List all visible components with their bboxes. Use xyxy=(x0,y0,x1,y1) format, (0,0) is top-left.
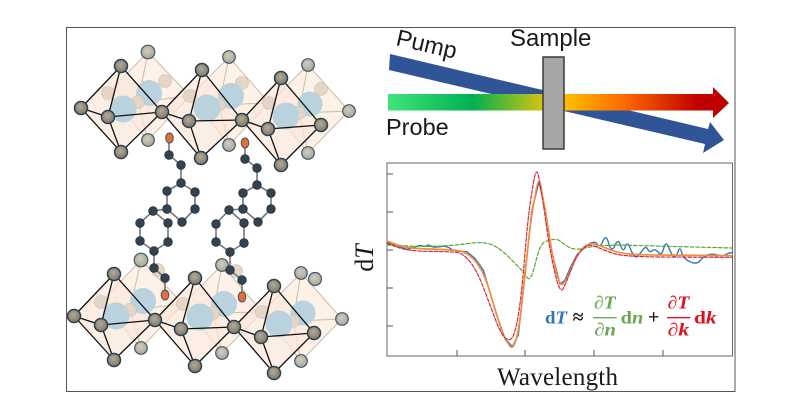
x axis label: Wavelength xyxy=(497,364,618,391)
formula: dT/dk term: ∂k xyxy=(668,319,689,339)
label: Pump: Pump xyxy=(394,25,460,64)
curves xyxy=(387,172,732,347)
formula: approx: ≈ xyxy=(573,307,584,329)
formula xyxy=(545,292,717,339)
y axis label: dT xyxy=(350,243,379,272)
formula: dT/dn term: ∂T xyxy=(594,292,617,312)
formula: plus: + xyxy=(648,307,659,329)
formula: dT/dn term: dn xyxy=(621,308,643,328)
formula: dT/dk term: ∂T xyxy=(668,292,690,312)
organic molecule: left xyxy=(136,133,199,300)
bar: probe beam before sample xyxy=(388,94,544,110)
curve: orange fit xyxy=(387,182,732,347)
arrow: pump beam xyxy=(389,54,724,153)
formula: dT/dk term xyxy=(667,292,717,339)
organic molecule: right xyxy=(212,138,275,302)
curve: measured data xyxy=(387,182,732,347)
sample slab xyxy=(543,57,564,149)
label: Probe: Probe xyxy=(386,114,449,140)
formula: dT/dn term xyxy=(593,292,643,339)
arrow: probe beam after sample xyxy=(564,87,729,118)
curve: red dashed fit xyxy=(387,172,732,340)
outer frame xyxy=(66,28,735,392)
top perovskite layer xyxy=(74,45,355,172)
formula: dT: dT xyxy=(545,308,568,328)
formula: dT/dk term: dk xyxy=(694,308,717,328)
formula: dT/dn term: ∂n xyxy=(594,319,616,339)
bottom perovskite layer xyxy=(68,253,348,380)
chart: transient spectrum xyxy=(350,163,732,391)
curve: green dashed fit xyxy=(387,239,732,279)
label: Sample: Sample xyxy=(510,25,591,52)
chart axes xyxy=(387,163,732,356)
